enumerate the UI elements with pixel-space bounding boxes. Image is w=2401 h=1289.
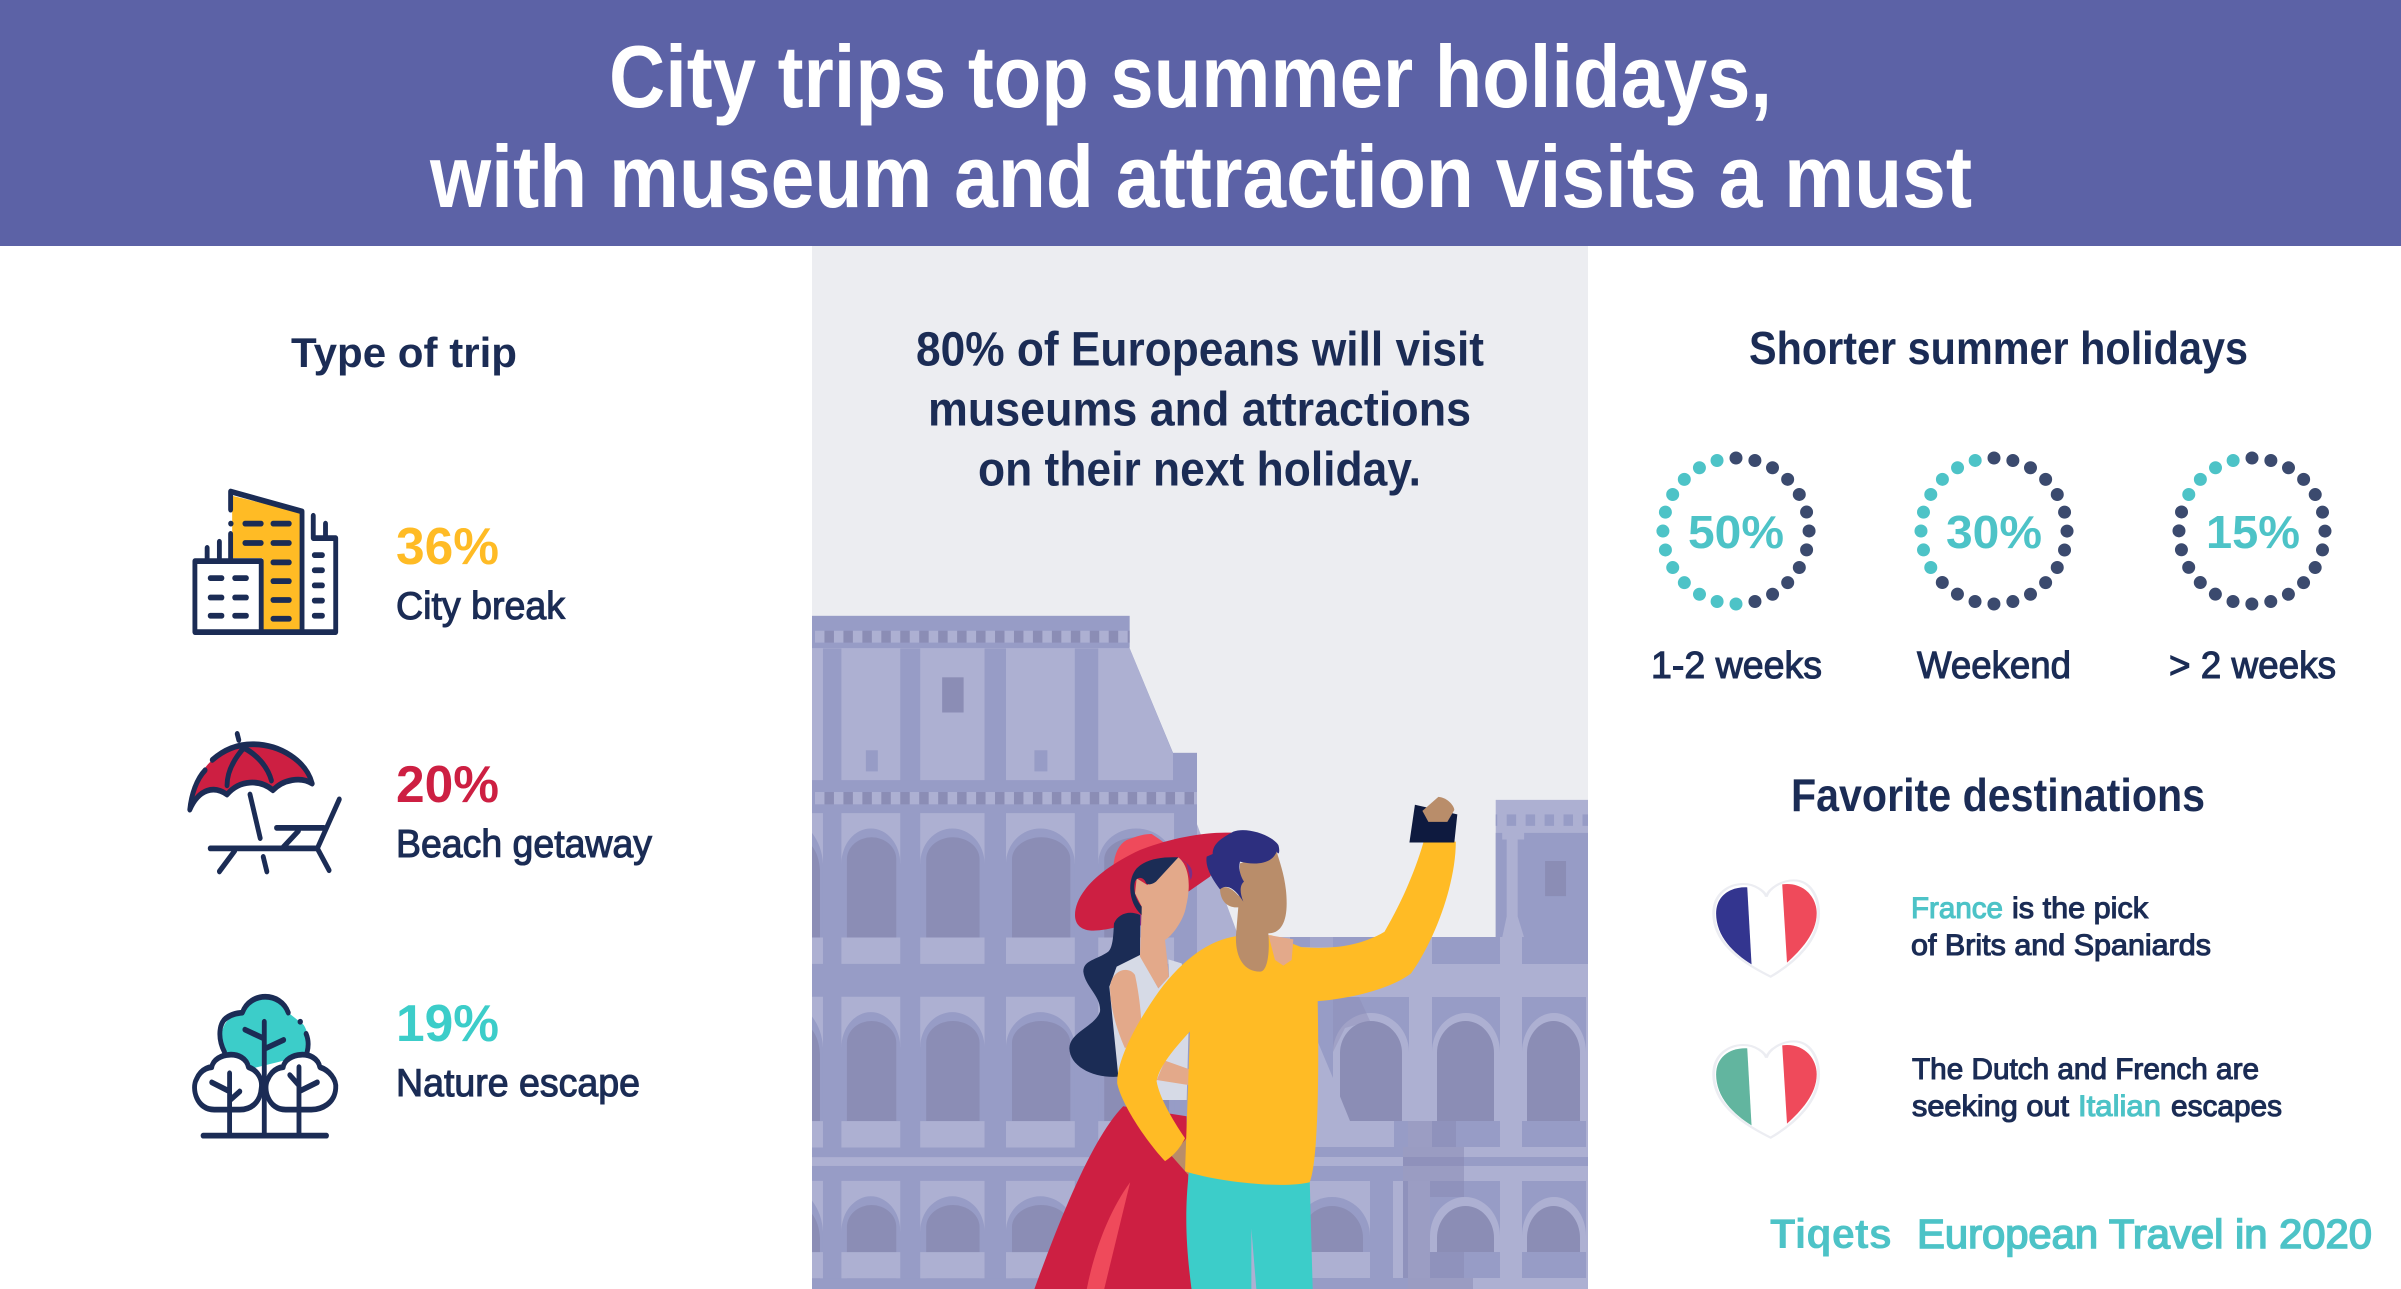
value: 30%: 30% — [1946, 506, 2042, 558]
text: France: of Brits and Spaniards — [1911, 929, 2211, 962]
text: Italy: seeking out — [1912, 1090, 2070, 1123]
stat: beach getaway: Beach getaway — [396, 823, 652, 866]
ring: 50% 1-2 weeks — [1663, 458, 1809, 604]
icon: trees — [195, 997, 336, 1136]
stat: nature escape — [396, 995, 640, 1105]
headline: 80% of Europeans: on their next holiday. — [978, 444, 1421, 496]
panel: type of trip — [190, 329, 652, 1136]
title: City trips top summer holidays, — [609, 27, 1772, 126]
stat: nature escape: Nature escape — [396, 1062, 640, 1105]
panel: favorite destinations — [1714, 769, 2282, 1138]
stat: nature escape: 19% — [396, 995, 499, 1053]
man body, arm, phone — [1117, 797, 1457, 1289]
text: Italy: Italian — [2078, 1090, 2161, 1123]
lower right arcades — [1197, 937, 1590, 1289]
text: France: France — [1911, 892, 2003, 925]
ring: 15% more than 2 weeks — [2179, 458, 2325, 604]
headline: 80% of Europeans: 80% of Europeans will visit — [916, 324, 1484, 376]
footer: logo and source — [1770, 1210, 2372, 1257]
value: 15%: 15% — [2206, 506, 2300, 558]
label: weekend: Weekend — [1917, 645, 2071, 687]
title — [429, 27, 1972, 226]
panel: shorter summer holidays — [1651, 322, 2336, 687]
label: 1-2 weeks: 1-2 weeks — [1651, 645, 1822, 687]
logo: Tiqets: Tiqets — [1770, 1210, 1892, 1257]
heading: shorter summer holidays: Shorter summer holidays — [1749, 322, 2248, 374]
stat: beach getaway — [396, 756, 652, 866]
wedge of light stone behind the couple — [1197, 824, 1239, 937]
text: Italy: escapes — [2171, 1090, 2282, 1123]
text: France: is the pick — [2012, 892, 2149, 925]
title: with museum and attraction visits a must — [429, 127, 1972, 226]
icon: Italy heart — [1714, 1041, 1819, 1138]
value: 50%: 50% — [1688, 506, 1784, 558]
heading: favorite destinations: Favorite destinations — [1791, 769, 2205, 821]
text: Italy — [1912, 1053, 2282, 1123]
woman — [1034, 833, 1247, 1289]
man — [1117, 797, 1457, 1289]
stat: city break — [396, 518, 565, 628]
icon: France heart — [1714, 880, 1819, 977]
woman head, hat and torso — [1069, 833, 1247, 1100]
illustration: Colosseum — [810, 616, 1596, 1289]
icon: beach umbrella and lounger — [190, 734, 339, 871]
illustration: couple taking a selfie — [1034, 797, 1457, 1289]
header banner — [0, 0, 2401, 246]
stat: city break: 36% — [396, 518, 499, 576]
text: Italy: The Dutch and French are — [1912, 1053, 2259, 1086]
heading: type of trip: Type of trip — [291, 329, 517, 376]
man head and hair, woman's hand on shoulder — [1206, 830, 1293, 972]
tower — [1496, 800, 1596, 937]
ring: 30% weekend — [1921, 458, 2067, 604]
stat: city break: City break — [396, 585, 565, 628]
text: France — [1911, 892, 2211, 962]
stat: beach getaway: 20% — [396, 756, 499, 814]
panel: central illustration — [810, 246, 1596, 1289]
source line: European Travel in 2020 — [1917, 1211, 2372, 1257]
headline: 80% of Europeans — [916, 324, 1484, 496]
headline: 80% of Europeans: museums and attractions — [928, 384, 1471, 436]
icon: city buildings — [195, 491, 336, 632]
woman skirt — [1034, 1106, 1192, 1289]
label: more than 2 weeks: > 2 weeks — [2169, 645, 2336, 687]
